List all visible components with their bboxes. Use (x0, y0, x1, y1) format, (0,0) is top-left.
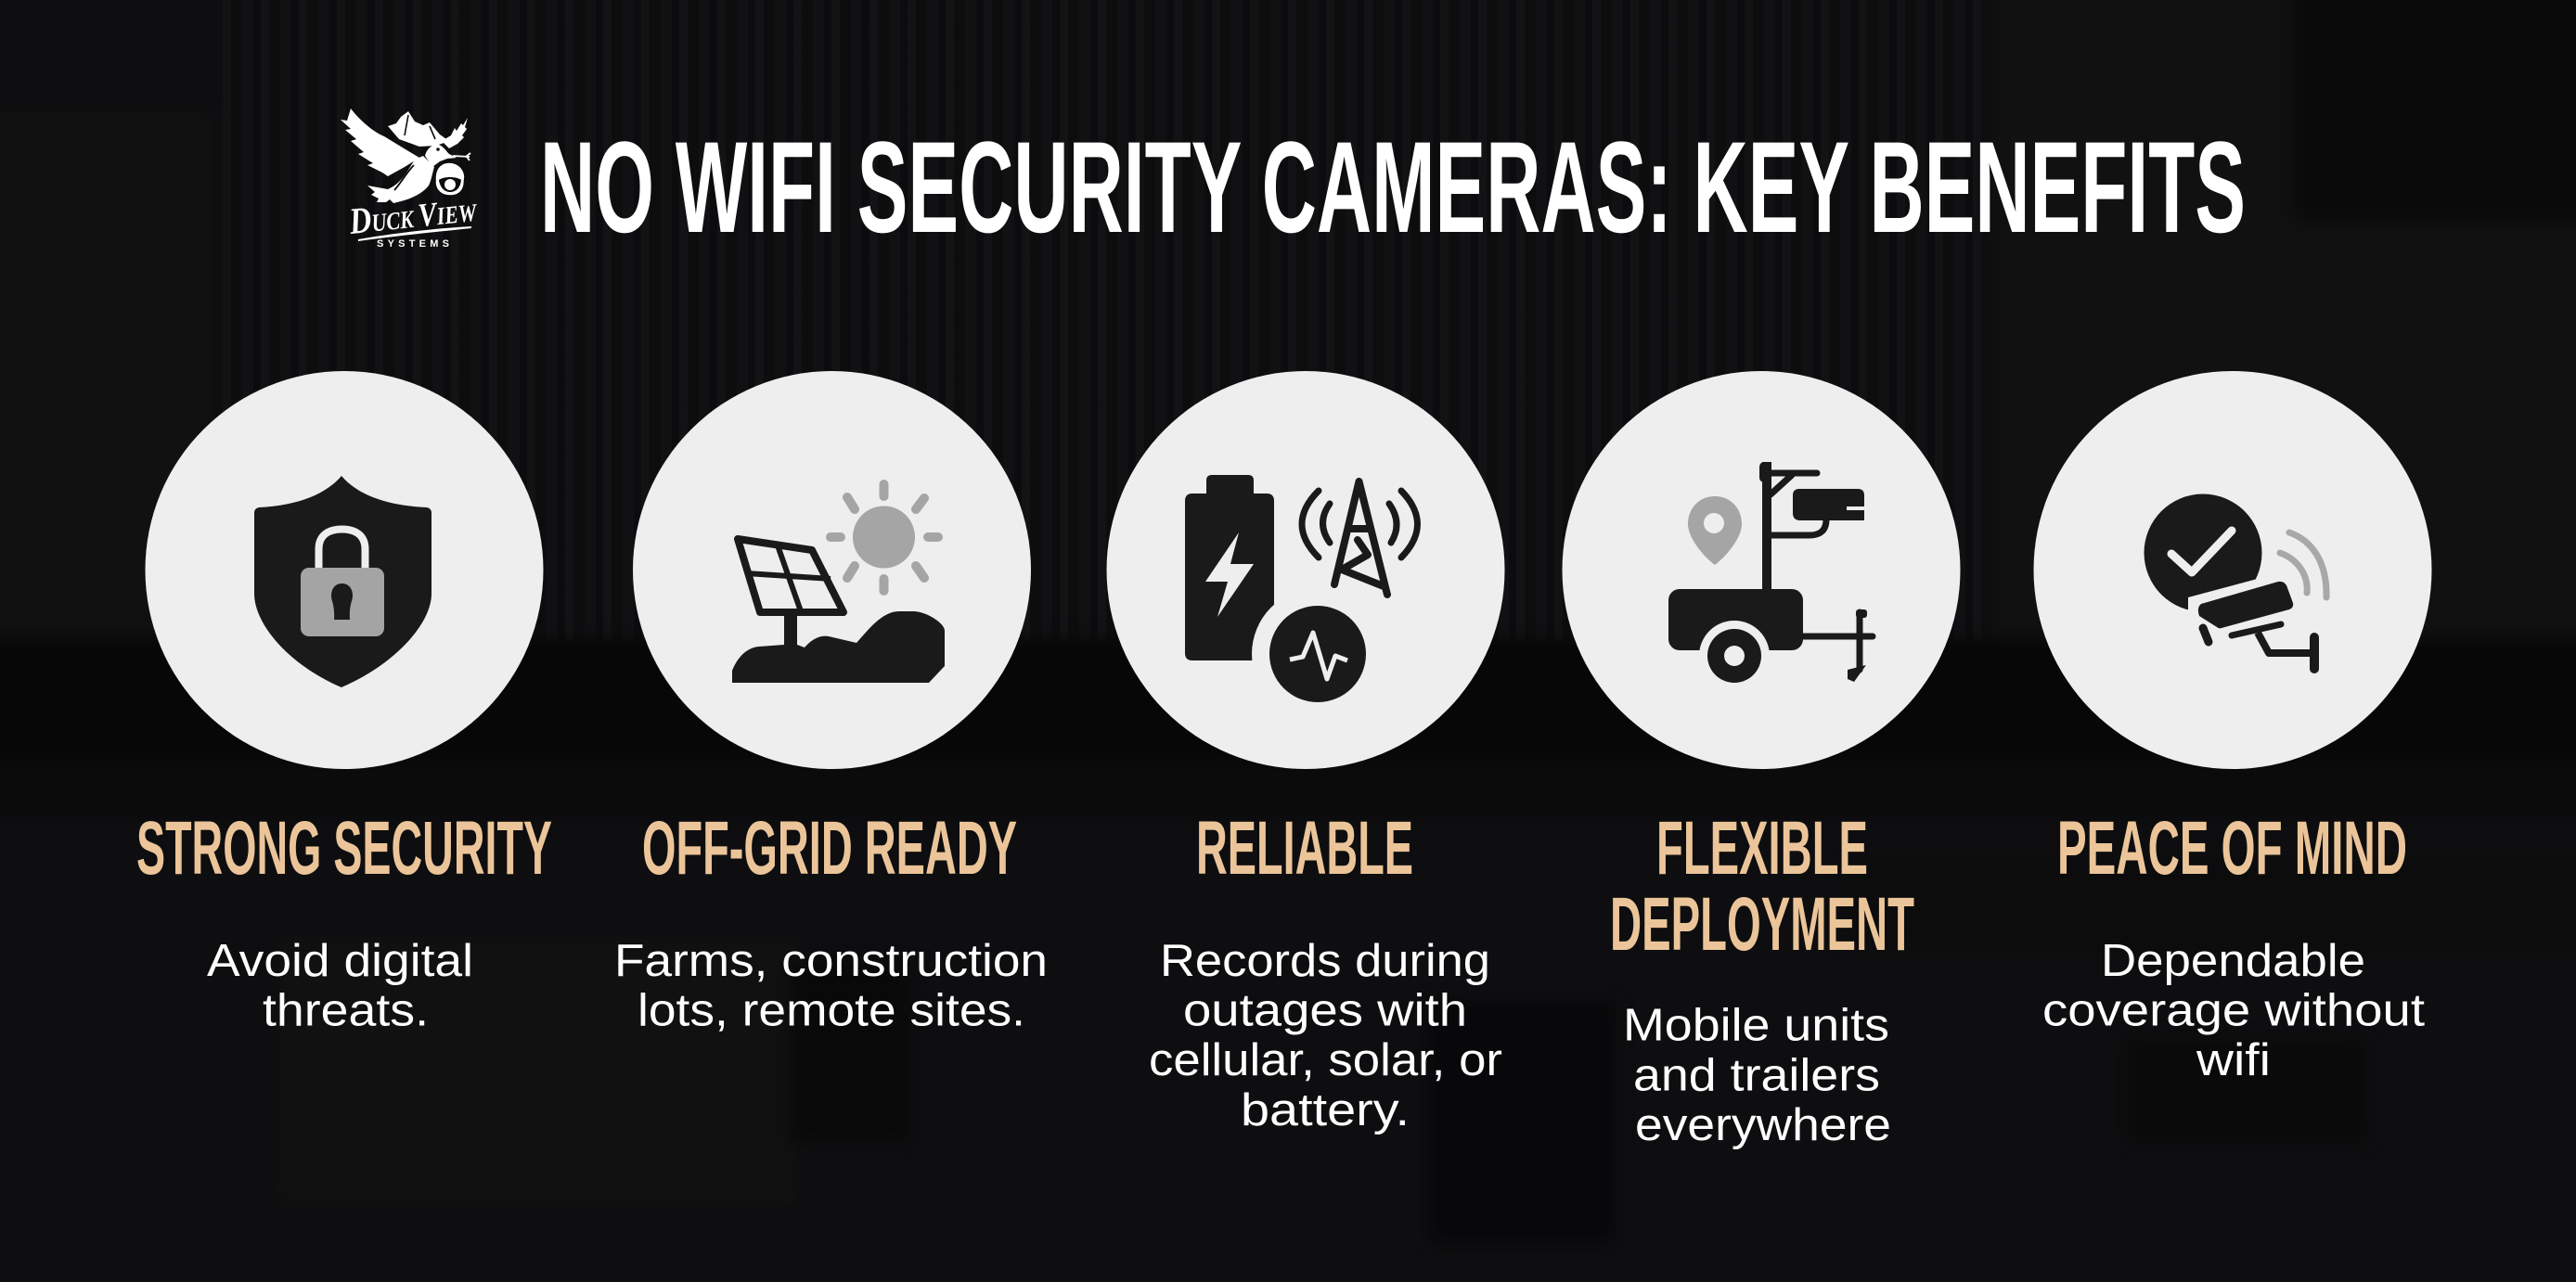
text: peace of mind description: wifi (2196, 1035, 2271, 1085)
text: strong security description (207, 936, 473, 1035)
text: off-grid description: Farms, construction (614, 936, 1048, 986)
icon: check badge and security camera (2144, 494, 2326, 669)
circle (633, 371, 1031, 769)
panel: flexible deployment (1563, 371, 1960, 769)
logo left wing (341, 109, 419, 176)
icon: shield with padlock (254, 476, 431, 687)
logo camera dome (435, 162, 465, 196)
text: off-grid description: lots, remote sites. (638, 985, 1025, 1035)
text: flexible deployment description (1623, 1000, 1891, 1150)
logo branch (453, 153, 470, 160)
text: flexible deployment description: and trailers (1633, 1050, 1880, 1100)
text: peace of mind description: Dependable (2101, 936, 2365, 986)
heading: off-grid ready: OFF-GRID READY (642, 806, 1017, 891)
circle (2034, 371, 2431, 769)
logo swoosh (358, 226, 471, 241)
text: reliable description: battery. (1241, 1085, 1410, 1135)
text: strong security description: Avoid digital (207, 936, 473, 986)
text: peace of mind description: coverage without (2042, 985, 2425, 1035)
text: peace of mind description (2042, 936, 2425, 1085)
panel: off-grid ready (633, 371, 1031, 769)
text: reliable description (1149, 936, 1502, 1135)
text: reliable description: cellular, solar, or (1149, 1035, 1502, 1085)
logo systems: SYSTEMS (377, 238, 449, 250)
icon: solar panel and sun (732, 484, 945, 683)
icon: battery, tower and pulse (1185, 475, 1418, 720)
heading: flexible deployment: DEPLOYMENT (1610, 882, 1914, 967)
text: off-grid description (614, 936, 1048, 1035)
logo duck head (425, 145, 457, 167)
text: strong security description: threats. (263, 985, 429, 1035)
logo: Duck View Systems (341, 109, 480, 250)
heading: reliable: RELIABLE (1196, 806, 1413, 891)
circle (1563, 371, 1960, 769)
logo wordmark: DUCK VIEW (346, 187, 480, 242)
text: flexible deployment description: Mobile units (1623, 1000, 1889, 1050)
text: reliable description: outages with (1183, 985, 1467, 1035)
circle (145, 371, 544, 769)
logo duck body (367, 156, 434, 203)
icon: camera trailer with location pin (1668, 462, 1873, 691)
panel: reliable (1106, 371, 1505, 769)
panel: strong security (145, 371, 544, 769)
panel: peace of mind (2034, 371, 2431, 769)
heading: flexible deployment: FLEXIBLE (1656, 806, 1868, 891)
text: flexible deployment description: everywhere (1635, 1100, 1891, 1150)
logo mountain (388, 111, 449, 147)
logo right wing (442, 118, 468, 148)
text: reliable description: Records during (1160, 936, 1490, 986)
background photo: dim curtain stripes (223, 0, 1995, 640)
heading: strong security: STRONG SECURITY (136, 806, 552, 891)
circle (1106, 371, 1505, 769)
heading: flexible deployment (1610, 806, 1914, 967)
